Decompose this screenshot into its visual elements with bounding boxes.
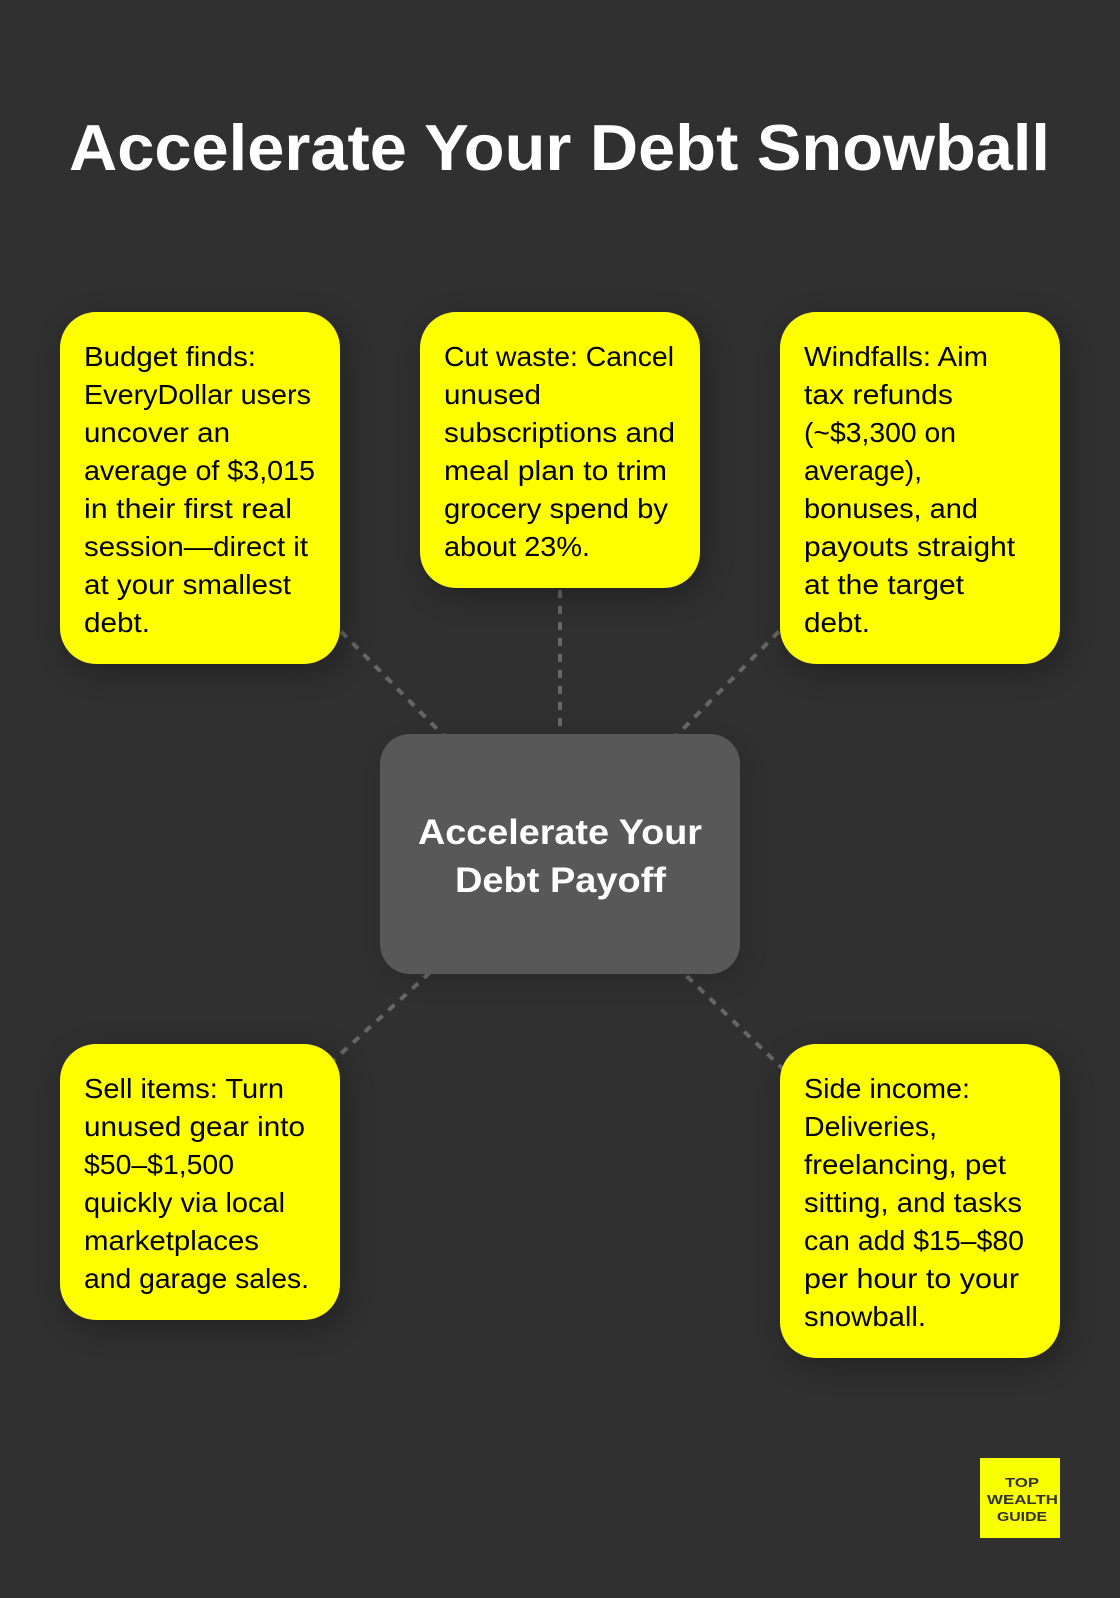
- text: side income: [804, 1073, 1024, 1332]
- text: windfalls: at the target: [804, 569, 964, 600]
- text: side income: Side income:: [804, 1073, 970, 1104]
- panel: center hub: [380, 734, 740, 974]
- logo: Top Wealth Guide: [980, 1458, 1060, 1538]
- text: sell items: and garage sales.: [84, 1263, 309, 1294]
- text: budget finds: average of $3,015: [84, 455, 315, 486]
- text: windfalls: Windfalls: Aim: [804, 341, 988, 372]
- text: side income: can add $15–$80: [804, 1225, 1024, 1256]
- text: cut waste: meal plan to trim: [444, 455, 667, 486]
- text: budget finds: session—direct it: [84, 531, 308, 562]
- text: sell items: $50–$1,500: [84, 1149, 234, 1180]
- text: windfalls: bonuses, and: [804, 493, 978, 524]
- text: windfalls: average),: [804, 455, 922, 486]
- text: sell items: Sell items: Turn: [84, 1073, 284, 1104]
- text: cut waste: subscriptions and: [444, 417, 675, 448]
- text: cut waste: Cut waste: Cancel: [444, 341, 674, 372]
- text: side income: snowball.: [804, 1301, 926, 1332]
- panel: side income: [780, 1044, 1060, 1358]
- text: windfalls: [804, 341, 1015, 638]
- text: budget finds: in their first real: [84, 493, 292, 524]
- text: budget finds: Budget finds:: [84, 341, 256, 372]
- text: side income: per hour to your: [804, 1263, 1019, 1294]
- panel: cut waste: [420, 312, 700, 588]
- text: budget finds: debt.: [84, 607, 150, 638]
- text: side income: Deliveries,: [804, 1111, 937, 1142]
- text: windfalls: (~$3,300 on: [804, 417, 956, 448]
- text: budget finds: uncover an: [84, 417, 230, 448]
- text: sell items: [84, 1073, 309, 1294]
- text: windfalls: debt.: [804, 607, 870, 638]
- text: center hub label: Debt Payoff: [455, 861, 666, 900]
- panel: budget finds: [60, 312, 340, 664]
- text: cut waste: [444, 341, 675, 562]
- text: side income: sitting, and tasks: [804, 1187, 1022, 1218]
- logo: Top Wealth Guide: WEALTH: [987, 1492, 1058, 1507]
- text: center hub label: Accelerate Your: [418, 813, 702, 852]
- text: sell items: quickly via local: [84, 1187, 285, 1218]
- text: budget finds: at your smallest: [84, 569, 291, 600]
- text: budget finds: EveryDollar users: [84, 379, 311, 410]
- text: cut waste: grocery spend by: [444, 493, 668, 524]
- text: sell items: unused gear into: [84, 1111, 305, 1142]
- text: windfalls: tax refunds: [804, 379, 953, 410]
- text: budget finds: [84, 341, 315, 638]
- panel: windfalls: [780, 312, 1060, 664]
- text: windfalls: payouts straight: [804, 531, 1015, 562]
- logo: Top Wealth Guide: GUIDE: [997, 1509, 1047, 1524]
- panel: sell items: [60, 1044, 340, 1320]
- text: cut waste: about 23%.: [444, 531, 590, 562]
- text: cut waste: unused: [444, 379, 541, 410]
- logo: Top Wealth Guide: TOP: [1005, 1475, 1039, 1490]
- text: sell items: marketplaces: [84, 1225, 259, 1256]
- text: side income: freelancing, pet: [804, 1149, 1006, 1180]
- text: center hub label: [418, 813, 702, 900]
- title: Accelerate Your Debt Snowball: [69, 111, 1050, 184]
- dashed connectors: [200, 450, 920, 1201]
